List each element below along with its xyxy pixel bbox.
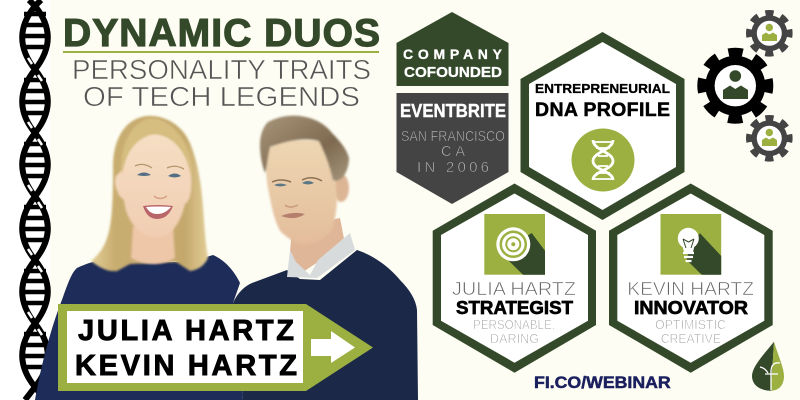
label: company: COMPANY <box>403 46 503 62</box>
eyes <box>137 172 181 178</box>
sweater <box>233 250 418 400</box>
panel: Julia Hartz strategist <box>433 184 596 373</box>
year: IN 2006 <box>417 159 489 176</box>
photo: Kevin Hartz <box>233 116 418 400</box>
trait 2: DARING <box>490 332 539 346</box>
hair <box>260 116 349 181</box>
face <box>115 133 191 237</box>
collar <box>287 233 355 278</box>
hair <box>91 116 208 271</box>
panel: entrepreneurial DNA profile <box>520 32 684 220</box>
heading line 1: ENTREPRENEURIAL <box>535 81 670 96</box>
panel: Kevin Hartz innovator <box>609 184 773 373</box>
icon: leaf logo <box>752 342 784 391</box>
role: INNOVATOR <box>634 297 748 318</box>
hair fringe <box>121 118 192 175</box>
name: Julia Hartz: JULIA HARTZ <box>78 315 294 347</box>
icon: small gear bottom <box>749 118 789 158</box>
icon: DNA circle <box>572 128 634 192</box>
nose <box>154 196 167 198</box>
photo: Julia Hartz <box>35 116 243 400</box>
trait 1: PERSONABLE, <box>473 318 555 332</box>
neck <box>290 218 345 274</box>
trait 1: OPTIMISTIC <box>655 318 726 332</box>
eyebrows <box>135 164 184 169</box>
person name: KEVIN HARTZ <box>627 279 754 299</box>
panel: company details <box>396 93 508 204</box>
eyes <box>274 181 314 186</box>
title: DYNAMIC DUOS <box>63 12 380 55</box>
face <box>266 140 337 244</box>
ear <box>333 174 349 202</box>
name: Kevin Hartz: KEVIN HARTZ <box>75 350 297 382</box>
icon: light bulb tile <box>660 214 721 275</box>
subtitle line 1: PERSONALITY TRAITS <box>72 54 371 85</box>
nose <box>285 205 298 207</box>
role: STRATEGIST <box>456 297 574 318</box>
sign frame <box>58 304 373 391</box>
subtitle line 2: OF TECH LEGENDS <box>83 81 360 112</box>
icon: white arrow <box>311 331 355 363</box>
mouth <box>281 213 305 218</box>
heading line 2: DNA PROFILE <box>535 99 670 121</box>
label: cofounded: COFOUNDED <box>404 64 502 81</box>
icon: small gear top <box>749 13 789 53</box>
panel: company cofounded header <box>396 12 508 86</box>
webinar link: FI.CO/WEBINAR <box>534 374 671 392</box>
title underline <box>63 51 379 53</box>
sweater <box>35 255 243 400</box>
mouth <box>143 205 173 219</box>
icon: large gear with person <box>702 53 768 119</box>
icon: DNA helix strip <box>22 0 48 400</box>
eyebrows <box>272 178 322 182</box>
trait 2: CREATIVE <box>661 332 721 346</box>
sign panel <box>67 311 303 383</box>
callout: name arrow sign <box>58 304 373 391</box>
state: CA <box>441 144 465 160</box>
neck <box>131 226 175 264</box>
city: SAN FRANCISCO <box>401 128 505 145</box>
company name: EVENTBRITE <box>400 101 506 121</box>
icon: target tile <box>484 214 545 275</box>
person name: JULIA HARTZ <box>452 279 576 299</box>
